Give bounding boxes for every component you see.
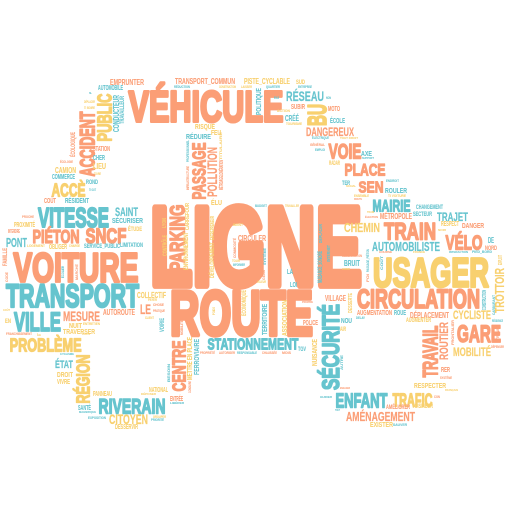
small words: right of roof: SOIR bbox=[438, 228, 447, 232]
small words: right side: NUISANCE bbox=[312, 339, 319, 366]
small words: lower left: TRAVERSER bbox=[63, 329, 95, 336]
small words: right side: RER bbox=[441, 367, 450, 374]
small words: right side: DE bbox=[488, 236, 494, 245]
small words: right side: COÛT bbox=[379, 255, 384, 270]
small words: lower left: PRATIQUE bbox=[153, 309, 165, 313]
small words: under and inside ROUTE: MOBILITÉ bbox=[179, 319, 184, 335]
small words: upper left: RÉSIDENT bbox=[65, 196, 89, 205]
small words: top centre: DÉVELOPPEMENT bbox=[208, 242, 216, 278]
small words: right side: COURSE bbox=[379, 250, 392, 254]
word: PIÉTON: PIÉTON bbox=[32, 226, 80, 247]
word: CENTRE: CENTRE bbox=[168, 340, 190, 392]
small words: top centre: CRÉÉ bbox=[285, 114, 299, 123]
small words: upper left: SAINT bbox=[115, 205, 138, 219]
small words: lower left: COÛT bbox=[3, 307, 10, 312]
small words: lower left: LIMITATION bbox=[120, 243, 143, 249]
small words: top centre: LOI bbox=[290, 282, 297, 289]
small words: right side: CON bbox=[434, 395, 440, 399]
small words: lower left: DESSERVIR bbox=[115, 424, 138, 431]
small words: right side: AUGMENTER bbox=[406, 318, 431, 324]
word: TRAIN: TRAIN bbox=[384, 218, 436, 246]
small words: top centre: ÉCOLE bbox=[330, 116, 345, 125]
word: PROBLÈME: PROBLÈME bbox=[10, 334, 82, 355]
small words: lower left: CHOSE bbox=[153, 303, 165, 307]
small words: right of roof: ROULER bbox=[385, 188, 407, 195]
small words: right side: CODE bbox=[342, 267, 350, 271]
small words: right of roof: ENSEMBLE bbox=[354, 194, 370, 198]
small words: lower left: ÎLE bbox=[36, 332, 41, 337]
small words: under and inside ROUTE: AUTORISER bbox=[219, 351, 235, 355]
small words: right side: DELAY bbox=[356, 316, 366, 320]
small words: top centre: TRANSPORT_COMMUN bbox=[175, 77, 235, 86]
small words: top centre: BIENT bbox=[233, 222, 243, 227]
small words: right side: AUGMENTATION bbox=[357, 310, 392, 317]
small words: upper left: LYON bbox=[162, 218, 168, 228]
small words: under and inside ROUTE: POIDS bbox=[212, 307, 216, 315]
small words: right side: RÉSIDENCE bbox=[492, 318, 503, 323]
word: ENFANT: ENFANT bbox=[336, 390, 388, 412]
word: RIVERAIN: RIVERAIN bbox=[98, 396, 166, 418]
small words: lower left: SERVICE_PUBLIC bbox=[84, 244, 120, 250]
small words: right of roof: ROUTE bbox=[354, 197, 362, 201]
small words: lower left bbox=[3, 243, 185, 431]
small words: top centre: CIRCULER bbox=[238, 234, 266, 243]
word: POLLUTION: POLLUTION bbox=[204, 147, 220, 197]
small words: under and inside ROUTE: TERRITOIRE bbox=[262, 304, 269, 335]
word: DANGEREUX: DANGEREUX bbox=[306, 125, 354, 139]
small words: lower left: ENTRÉE bbox=[170, 394, 183, 403]
small words: top centre: INFRASTRUCTURE bbox=[185, 166, 190, 190]
small words: top centre: COMMODITÉ bbox=[232, 238, 237, 258]
small words: under and inside ROUTE: CONDUIRE bbox=[188, 381, 192, 393]
small words: right side: BRUIT bbox=[344, 259, 360, 268]
word: ACCÈ: ACCÈ bbox=[52, 180, 86, 200]
word: PONT: PONT bbox=[6, 235, 27, 250]
small words: right side: FOI bbox=[365, 274, 370, 282]
small words: top centre: CONSTRUCTION bbox=[219, 85, 236, 89]
small words: lower left: OBLIGER bbox=[49, 244, 67, 251]
small words: right side: ROUE bbox=[394, 310, 406, 317]
small words: upper left: ÉCOLOGIE bbox=[60, 159, 73, 164]
small words: right of roof: MÉTROPOLE bbox=[380, 212, 412, 221]
small words: lower left: PRIORITÉ bbox=[151, 417, 165, 422]
small words: upper left: TI BOIRE bbox=[84, 105, 95, 110]
small words: lower left: LIBÉRER bbox=[170, 400, 185, 405]
small words: right of roof: SUPPORT bbox=[362, 156, 374, 160]
small words: upper left: INTERDIRE bbox=[8, 229, 20, 235]
small words: right of roof: ÉLECTRIQUE bbox=[312, 135, 329, 140]
small words: right of roof: RESPECT bbox=[441, 221, 459, 228]
small words: right side: FRONTALIER bbox=[450, 320, 455, 345]
word: TRAJET: TRAJET bbox=[437, 210, 468, 224]
small words: lower left: EN bbox=[5, 319, 11, 325]
small words: right side: DESSERTE bbox=[348, 293, 354, 313]
small words: upper left: EMPRUNTER bbox=[110, 78, 144, 87]
small words: right side: EXPLOIT bbox=[498, 255, 504, 265]
small words: right of roof: AXE bbox=[361, 151, 372, 158]
word: LE: LE bbox=[140, 301, 151, 317]
small words: top centre: BUDGET bbox=[255, 204, 268, 208]
small words: upper left: PROCHE bbox=[22, 214, 34, 219]
small words: right side: ENGAGER bbox=[340, 386, 351, 390]
small words: upper left: SL bbox=[89, 91, 92, 95]
small words: lower left: PORTE bbox=[82, 332, 90, 336]
small words: upper left: ÉCOLOGIQUE bbox=[69, 132, 77, 157]
small words: lower left: NATIONAL bbox=[149, 387, 168, 394]
small words: top centre: MOTO bbox=[328, 106, 340, 113]
small words: lower left: FAMILLE bbox=[3, 248, 9, 266]
word: VOITURE: VOITURE bbox=[13, 245, 138, 291]
word: TROTTOIR: TROTTOIR bbox=[492, 268, 507, 313]
small words: right side: AUTRE bbox=[340, 354, 344, 370]
small words: right of roof: TI VOITURE bbox=[388, 194, 407, 198]
small words: top centre: CARREFOUR bbox=[185, 203, 191, 230]
small words: top centre: TOURISME bbox=[286, 122, 303, 126]
small words: upper left: ROND bbox=[86, 180, 98, 186]
word: CITOYEN: CITOYEN bbox=[109, 411, 148, 427]
small words: right side: NORD bbox=[485, 246, 497, 252]
small words: right side: CARBURANT bbox=[491, 295, 496, 315]
word: RÉSEAU: RÉSEAU bbox=[286, 88, 324, 104]
small words: top centre: QUARTIER bbox=[266, 85, 280, 89]
small words: right of roof: ENDROIT bbox=[386, 179, 400, 183]
small words: right of roof: GÉNÉRAL bbox=[310, 142, 326, 147]
small words: top centre: NON bbox=[326, 96, 331, 100]
small words: right side: AIR bbox=[340, 327, 346, 333]
small words: lower left: ÉTAT bbox=[55, 358, 73, 371]
small words: right of roof: TOUT DROIT bbox=[340, 136, 358, 140]
word: VÉHICULE: VÉHICULE bbox=[128, 82, 284, 132]
small words: upper left: ÉTUDE bbox=[128, 225, 142, 233]
small words: top centre: ENVIRONNEMENT bbox=[184, 232, 190, 270]
small words: upper left: TRAVAILLEUR bbox=[120, 96, 126, 124]
small words: right side: PROPRE bbox=[302, 300, 313, 304]
small words: top centre: POLITIQUE bbox=[256, 88, 263, 115]
small words: under and inside ROUTE: RESPONSABLE bbox=[237, 351, 257, 355]
small words: top centre: INTERNET bbox=[326, 245, 331, 262]
small words: right side: PIED_BORD bbox=[472, 250, 492, 254]
word: ROUTIER: ROUTIER bbox=[437, 322, 451, 360]
small words: under and inside ROUTE: TGV bbox=[298, 347, 306, 353]
small words: lower left: MAGNIFIQUE bbox=[79, 410, 96, 414]
small words: top centre: SUD bbox=[296, 80, 305, 86]
word: CYCLISTE: CYCLISTE bbox=[453, 308, 491, 322]
small words: upper left: SÉCURISER bbox=[112, 216, 143, 225]
small words: right side: DÉPLACEMENT bbox=[410, 311, 449, 320]
word: TRAVAIL: TRAVAIL bbox=[419, 325, 442, 378]
word: ROUTE: ROUTE bbox=[170, 279, 313, 349]
small words: top centre: LAISSER bbox=[241, 85, 252, 89]
small words: top centre: VALEUR bbox=[257, 280, 266, 284]
small words: lower left: ENTRETIEN bbox=[83, 322, 100, 326]
small words: upper left: AUTOMOBILE bbox=[98, 85, 123, 92]
small words: top centre: RÉDUCTION bbox=[174, 84, 190, 89]
small words: lower left: GROUPER bbox=[153, 415, 166, 419]
word: STATIONNEMENT: STATIONNEMENT bbox=[208, 336, 299, 354]
small words: under and inside ROUTE: METTRE EN PLACE bbox=[187, 337, 194, 380]
small words: top centre: SYSTÈME bbox=[262, 247, 267, 265]
small words: right of roof: SECTEUR bbox=[413, 212, 432, 218]
small words: top centre: INFORMER bbox=[233, 263, 245, 267]
small words: top centre: NUISANCE_SONORE bbox=[318, 251, 324, 283]
small words: top centre: ENTREPRISE bbox=[298, 85, 312, 89]
small words: top centre: TRAVAILLER bbox=[285, 204, 299, 208]
word: PLACE: PLACE bbox=[344, 160, 386, 180]
small words: top centre: ROUE bbox=[274, 96, 279, 100]
small words: top centre: ÉLU bbox=[211, 198, 222, 207]
small words: right side: AMÉLIORATION bbox=[342, 253, 362, 258]
small words: top centre: ENTREPRENEUR bbox=[210, 216, 216, 240]
small words: right side: NOU bbox=[341, 318, 352, 325]
word: SNCF: SNCF bbox=[86, 225, 127, 248]
small words: top centre: TOUR bbox=[232, 259, 240, 263]
small words: under and inside ROUTE: MOIS bbox=[282, 351, 292, 355]
small words: right side: VOISINEUR bbox=[412, 404, 433, 410]
word: MAIRIE: MAIRIE bbox=[372, 196, 410, 216]
small words: upper left bbox=[8, 78, 169, 256]
small words: lower left: DROIT bbox=[57, 372, 74, 379]
small words: lower left: BESOIN bbox=[166, 364, 171, 382]
word: TRANSPORT: TRANSPORT bbox=[6, 278, 139, 314]
small words: top centre: RISQUE bbox=[195, 124, 215, 131]
small words: upper left: COMMERCE bbox=[52, 174, 75, 181]
small words: top centre: LA bbox=[287, 269, 293, 276]
word: TRAFIC: TRAFIC bbox=[392, 390, 432, 410]
small words: under and inside ROUTE: FERROVIAIRE bbox=[194, 339, 201, 375]
small words: right side: PASSAGE_PIÉTON bbox=[365, 249, 370, 272]
small words: top centre: FEU bbox=[211, 130, 221, 137]
word: LIGNE: LIGNE bbox=[150, 185, 362, 309]
small words: right side: DÉPENSER bbox=[491, 344, 504, 349]
small words: lower left: CODE bbox=[4, 272, 9, 282]
small words: right side: RESPECTER bbox=[414, 383, 446, 390]
word: ACCIDENT: ACCIDENT bbox=[76, 111, 99, 176]
small words: top centre bbox=[174, 77, 345, 289]
small words: upper left: PROXIMITÉ bbox=[14, 220, 35, 229]
small words: lower left: FRANCHISSEMENT bbox=[6, 332, 33, 336]
small words: right side: INTERACTION bbox=[449, 250, 468, 254]
small words: lower left: CHARGE bbox=[69, 244, 80, 248]
word: AUTOMOBILISTE: AUTOMOBILISTE bbox=[372, 239, 440, 254]
small words: upper left: STATION bbox=[93, 146, 110, 153]
small words: top centre: PISTE_CYCLABLE bbox=[244, 77, 290, 86]
small words: top centre: DÉPLACER bbox=[316, 223, 323, 243]
small words: lower left: MARCHE bbox=[75, 263, 79, 280]
small words: right of roof: DANGER bbox=[462, 223, 484, 230]
small words: under and inside ROUTE: ASSOCIATION bbox=[282, 300, 289, 336]
small words: upper left: COÛT bbox=[44, 196, 56, 205]
small words: right of roof: RADAR bbox=[329, 161, 340, 167]
small words: right side: TRANSIT bbox=[495, 325, 500, 340]
small words: lower left: PAYER bbox=[148, 298, 157, 302]
small words: right side: VILLAGE bbox=[325, 294, 346, 303]
small words: upper left: CAMION bbox=[55, 166, 76, 175]
word: MESURE: MESURE bbox=[63, 308, 100, 324]
small words: lower left: PANNEAU bbox=[93, 391, 112, 398]
small words: upper left: DÉPLACER bbox=[84, 99, 95, 104]
small words: top centre: GENS bbox=[261, 270, 266, 280]
word: PUBLIC: PUBLIC bbox=[94, 94, 116, 142]
word: VITESSE: VITESSE bbox=[38, 202, 109, 233]
small words: lower left: SANTÉ bbox=[78, 403, 91, 412]
word: VILLE: VILLE bbox=[14, 307, 61, 337]
word: PASSAGE: PASSAGE bbox=[188, 142, 210, 200]
word: VOIE: VOIE bbox=[328, 140, 362, 164]
word: SÉCURITÉ: SÉCURITÉ bbox=[317, 304, 345, 390]
small words: right side: SYSTÈME bbox=[440, 375, 452, 380]
small words: right of roof: TRAM bbox=[367, 210, 374, 214]
small words: right of roof: SOCIAL bbox=[346, 184, 356, 188]
small words: lower left: ÉCOLIER bbox=[60, 266, 65, 278]
small words: top centre: RÉDUIRE bbox=[186, 132, 211, 141]
small words: lower left: VOIRIE bbox=[160, 318, 166, 332]
small words: top centre: PROFESSIONNEL bbox=[185, 140, 190, 162]
small words: under and inside ROUTE: CHAUSSÉE bbox=[262, 350, 278, 355]
small words: lower left: AUTOROUTE bbox=[103, 308, 135, 317]
small words: right side: FRANCE bbox=[413, 250, 425, 254]
small words: upper left: TIGRE bbox=[94, 171, 101, 176]
small words: top centre: TITULAIRE bbox=[219, 131, 223, 160]
small words: upper left: CONDUCTEUR bbox=[112, 95, 121, 132]
word: BU: BU bbox=[302, 104, 332, 126]
small words: right side: FRANÇAIS bbox=[445, 388, 458, 392]
small words: top centre: MÉTROAGGLOMÉRATION bbox=[217, 160, 225, 190]
word: AMÉNAGEMENT: AMÉNAGEMENT bbox=[346, 409, 415, 424]
word: COLLECTIF: COLLECTIF bbox=[137, 290, 166, 300]
small words: lower left: DÉPOSER bbox=[141, 391, 157, 396]
small words: upper left: CONTRÔLE bbox=[161, 235, 169, 256]
small words: right of roof: CHANGEMENT bbox=[416, 205, 443, 211]
small words: lower left: NUIT bbox=[69, 323, 83, 330]
small words: lower left: LOGEMENT bbox=[27, 244, 46, 248]
small words: under and inside ROUTE bbox=[179, 290, 306, 393]
small words: right side: EXISTER bbox=[370, 422, 393, 429]
word: MOBILITÉ: MOBILITÉ bbox=[453, 344, 491, 359]
small words: right side: GUIDER bbox=[320, 395, 333, 399]
small words: lower left: VIVRE bbox=[57, 379, 70, 386]
small words: upper left: CHER bbox=[93, 155, 105, 162]
word: VÉLO: VÉLO bbox=[446, 232, 482, 254]
small words: lower left: EXPOSITION bbox=[88, 416, 106, 420]
small words: lower left: CLIENT bbox=[145, 316, 155, 320]
small words: right of roof: EMPLOI bbox=[315, 148, 325, 152]
small words: right side: AMÉLIORER bbox=[386, 403, 410, 411]
small words: right of roof: ÉLECTION bbox=[365, 214, 378, 219]
small words: under and inside ROUTE: ÉCONOMIQUE bbox=[240, 290, 248, 316]
small words: upper left: LIEU bbox=[93, 162, 106, 171]
word: SEN: SEN bbox=[358, 180, 384, 196]
word: CHEMIN: CHEMIN bbox=[344, 220, 380, 235]
small words: lower left: CYCLISME bbox=[60, 352, 74, 356]
word: PARKING: PARKING bbox=[166, 204, 189, 272]
small words: top centre: ACTION bbox=[277, 109, 290, 113]
small words: upper left: TI OUT bbox=[89, 188, 97, 192]
small words: right side: POLICE bbox=[303, 320, 318, 327]
small words: under and inside ROUTE: PROPRIÉTÉ bbox=[200, 350, 215, 355]
small words: right side: CONSTRUCTION bbox=[482, 290, 488, 310]
small words: right side: TOUT bbox=[335, 408, 340, 412]
small words: right of roof bbox=[310, 135, 484, 232]
word: RÉGION: RÉGION bbox=[72, 354, 94, 404]
small words: right of roof: TER bbox=[342, 181, 350, 187]
small words: top centre: SUBIR bbox=[291, 104, 305, 111]
small words: right side bbox=[302, 236, 504, 429]
small words: right side: SAUVER bbox=[393, 423, 407, 427]
